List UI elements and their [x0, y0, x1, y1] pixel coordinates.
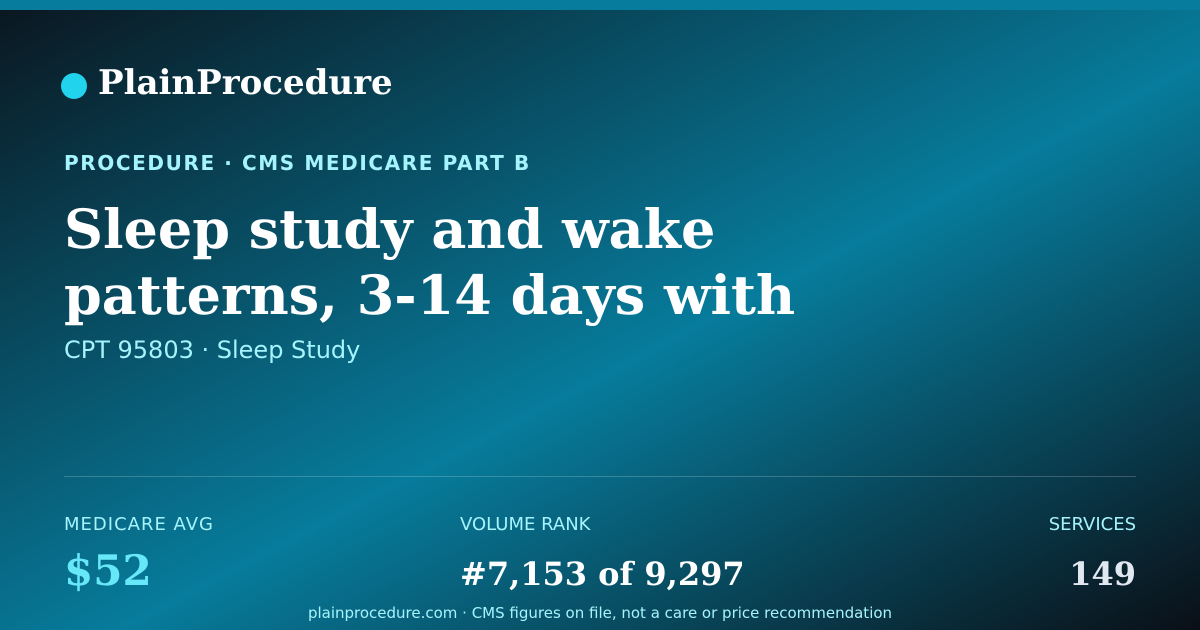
stat value: 149 — [1069, 555, 1136, 593]
title: patterns, 3-14 days with — [64, 263, 795, 327]
subtitle: CPT 95803 · Sleep Study — [64, 336, 360, 364]
eyebrow label: PROCEDURE · CMS MEDICARE PART B — [64, 151, 531, 175]
divider — [64, 476, 1136, 477]
stat label: VOLUME RANK — [460, 514, 590, 535]
stat: volume rank — [460, 514, 745, 593]
stat: medicare average — [64, 514, 214, 595]
stat value: #7,153 of 9,297 — [460, 555, 745, 593]
stat label: SERVICES — [1049, 514, 1136, 535]
logo — [61, 63, 393, 103]
top accent bar — [0, 0, 1200, 10]
brand name: PlainProcedure — [98, 63, 393, 103]
title — [64, 197, 795, 327]
footer note: plainprocedure.com · CMS figures on file, not a care or price recommendation — [308, 604, 892, 622]
title: Sleep study and wake — [64, 197, 715, 261]
stat label: MEDICARE AVG — [64, 514, 214, 535]
icon: logo dot — [61, 73, 87, 99]
stat value: $52 — [64, 546, 152, 595]
stat: services — [1049, 514, 1136, 593]
